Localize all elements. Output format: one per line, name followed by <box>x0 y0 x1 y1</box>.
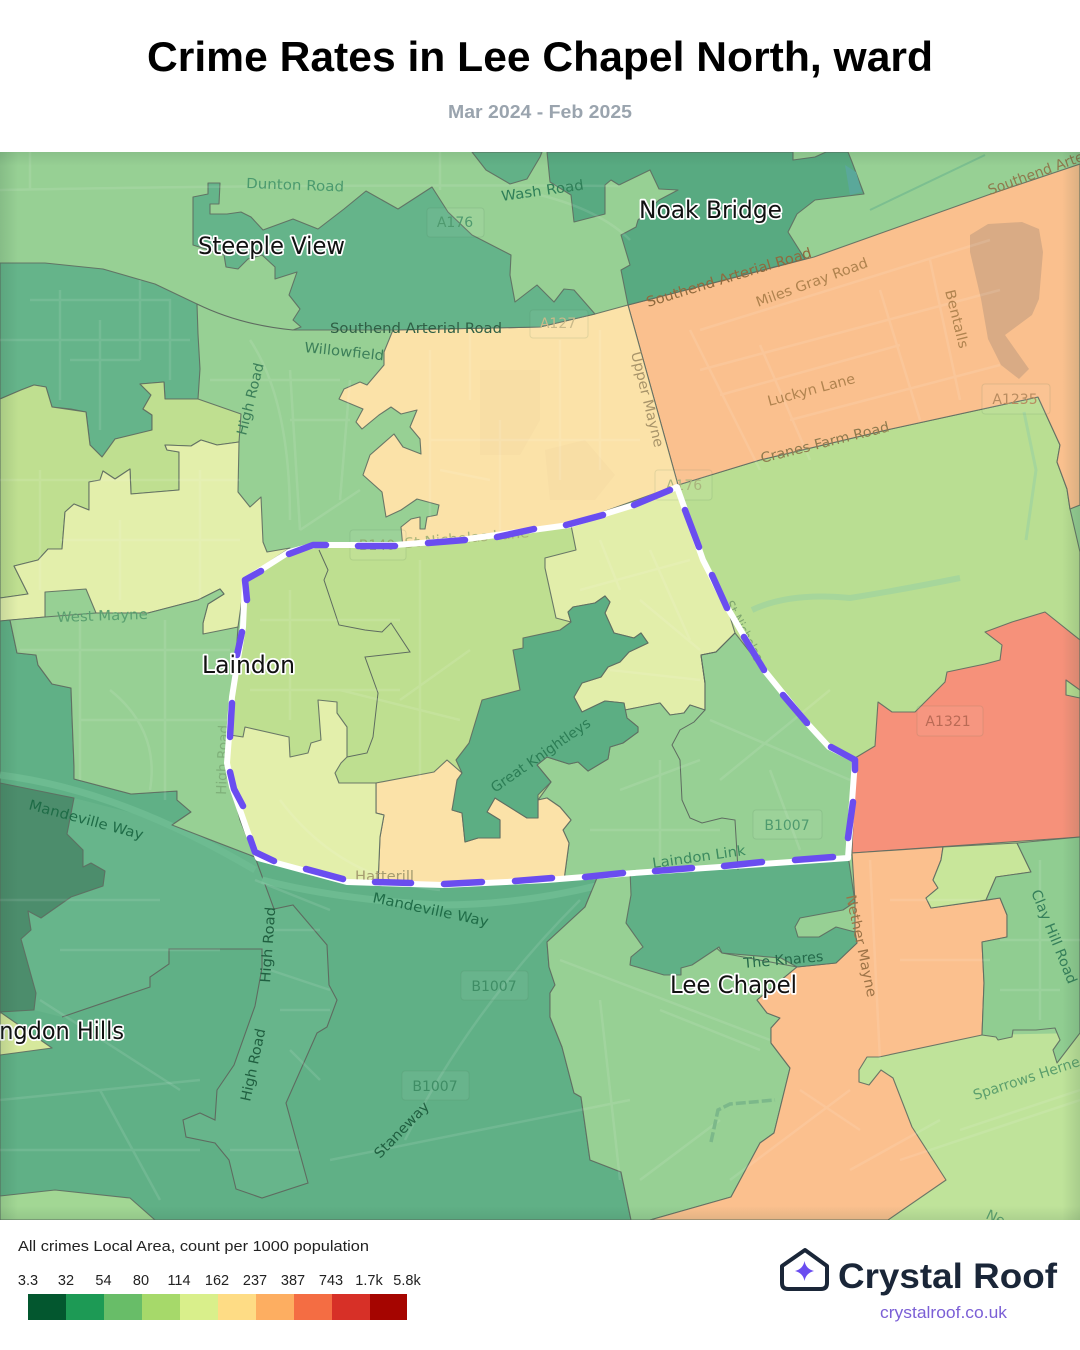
south-west sub-area outline <box>62 857 337 1198</box>
road names: Willowfield <box>304 340 385 364</box>
region: large south-west dark green <box>0 620 631 1220</box>
Mandeville Way road band <box>0 775 600 905</box>
road shield labels: A1235 <box>992 392 1038 408</box>
legend <box>18 1239 421 1320</box>
ward: south-west pale area <box>227 700 384 884</box>
map base area <box>0 152 1080 1034</box>
road names: High Road <box>234 361 268 437</box>
road shield labels: A127 <box>540 316 576 332</box>
legend scale values: 32 <box>58 1273 74 1289</box>
legend scale values: 237 <box>243 1273 267 1289</box>
region: Lee Chapel dark green <box>626 855 857 975</box>
region: red east <box>852 612 1080 853</box>
legend scale values: 114 <box>167 1273 191 1289</box>
ward: inner west boundary <box>319 550 410 757</box>
road names: Staneway <box>371 1099 433 1162</box>
arterial road boundary <box>197 304 293 330</box>
waterway in north <box>870 155 985 210</box>
road names: High Road <box>258 906 279 983</box>
region: darkest area <box>0 783 105 1012</box>
street network <box>0 152 1080 1200</box>
title: Crime Rates in Lee Chapel North, ward <box>147 33 933 80</box>
legend scale values: 3.3 <box>18 1273 38 1289</box>
region: west pale yellow-green <box>0 440 290 634</box>
ward: south-east mid green <box>537 633 855 880</box>
legend scale values: 743 <box>319 1273 343 1289</box>
road names: Luckyn Lane <box>766 371 857 410</box>
website link: crystalroof.co.uk <box>880 1304 1008 1322</box>
road names: Wash Road <box>500 178 585 205</box>
road names: Ne <box>983 1207 1007 1230</box>
region: west light green <box>0 382 241 598</box>
road names: High Road <box>214 725 232 795</box>
legend scale values: 387 <box>281 1273 305 1289</box>
region: north-west dark green <box>0 263 200 457</box>
road names: Mandeville Way <box>27 797 145 843</box>
road names <box>27 142 1080 1230</box>
road shield labels: A176 <box>666 478 702 494</box>
region: south-east light green <box>859 1033 1080 1220</box>
legend scale values: 54 <box>95 1273 112 1289</box>
region: west of Laindon mid green <box>10 589 255 857</box>
place label: Noak Bridge: Noak Bridge <box>639 196 782 224</box>
icon: house with star <box>782 1250 827 1289</box>
road names: St Nicholas <box>720 598 766 664</box>
road names: The Knares <box>742 949 824 972</box>
region: east light green <box>678 397 1080 855</box>
ward: inner sub-area boundary <box>672 633 738 870</box>
road names: Great Knightleys <box>488 715 594 796</box>
map edge vignette <box>0 152 1080 1220</box>
road names: Dunton Road <box>246 176 344 195</box>
road shields <box>350 208 1050 1100</box>
road shield labels: A176 <box>437 215 473 231</box>
logo wordmark: Crystal Roof <box>838 1257 1057 1296</box>
region: Langdon Hills pale patch <box>0 1012 52 1055</box>
road shield labels <box>359 215 1038 1095</box>
logo: Crystal Roof <box>782 1250 1057 1322</box>
subtitle: date range: Mar 2024 - Feb 2025 <box>448 101 632 122</box>
legend title: All crimes Local Area, count per 1000 population <box>18 1239 369 1255</box>
river in east park <box>752 578 960 610</box>
railway track <box>711 1100 775 1142</box>
road names: Laindon Link <box>651 843 748 872</box>
place label: Steeple View: Steeple View <box>198 232 345 260</box>
region: Noak Bridge dark green <box>547 152 864 305</box>
lake on orange region <box>970 222 1043 379</box>
legend scale values: 162 <box>205 1273 229 1289</box>
road names: Bentalls <box>941 288 971 350</box>
road names: St Nicholas Lane <box>404 525 530 552</box>
legend scale values: 5.8k <box>393 1273 421 1289</box>
ward boundary: white casing <box>227 487 855 885</box>
region: dark north strip <box>472 152 542 184</box>
ward: base light green <box>234 528 746 798</box>
road names: Hatterill <box>355 869 414 885</box>
road names: Clay Hill Road <box>1027 888 1080 986</box>
legend scale values <box>18 1273 421 1289</box>
road names: Cranes Farm Road <box>759 419 891 467</box>
road names: Southend Arterial Road <box>330 321 502 337</box>
road names: Southend Arterial Road <box>644 245 814 311</box>
road names: High Road <box>238 1027 269 1103</box>
road names: Nether Mayne <box>842 894 879 999</box>
yellow built-up patches <box>480 370 615 500</box>
water in Noak Bridge <box>845 165 862 195</box>
place label: Lee Chapel: Lee Chapel <box>670 971 797 999</box>
road names: Mandeville Way <box>371 890 490 930</box>
region: south mid green <box>547 870 797 1220</box>
region: Steeple View dark green <box>193 183 595 330</box>
road shield labels: B140 <box>359 538 395 554</box>
region: east mid green <box>982 837 1080 1063</box>
park stream <box>1024 412 1036 540</box>
road names: Miles Gray Road <box>754 255 870 311</box>
place label: Laindon: Laindon <box>202 651 295 679</box>
region: bottom-left corner light <box>0 1190 155 1220</box>
road shield labels: B1007 <box>471 979 517 995</box>
legend scale values: 1.7k <box>355 1273 383 1289</box>
road names: Upper Mayne <box>627 350 666 449</box>
region: south-east orange <box>650 847 1007 1220</box>
road shield labels: B1007 <box>764 818 810 834</box>
road names: West Mayne <box>57 607 148 626</box>
region: orange north-east <box>628 164 1080 509</box>
ward: south yellow <box>376 760 571 885</box>
region: south-west sub-area <box>222 845 254 858</box>
road shield labels: B1007 <box>412 1079 458 1095</box>
legend scale values: 80 <box>133 1273 149 1289</box>
ward: Great Knightleys dark green <box>452 596 648 842</box>
region: yellow north of ward <box>339 305 678 548</box>
legend colour swatches <box>28 1294 407 1320</box>
region: east pale green <box>926 843 1031 908</box>
ward boundary: purple dashes <box>230 490 855 884</box>
ward: north-east pale area <box>545 487 735 715</box>
road shield labels: A1321 <box>925 714 971 730</box>
road names: Sparrows Herne <box>971 1054 1080 1104</box>
